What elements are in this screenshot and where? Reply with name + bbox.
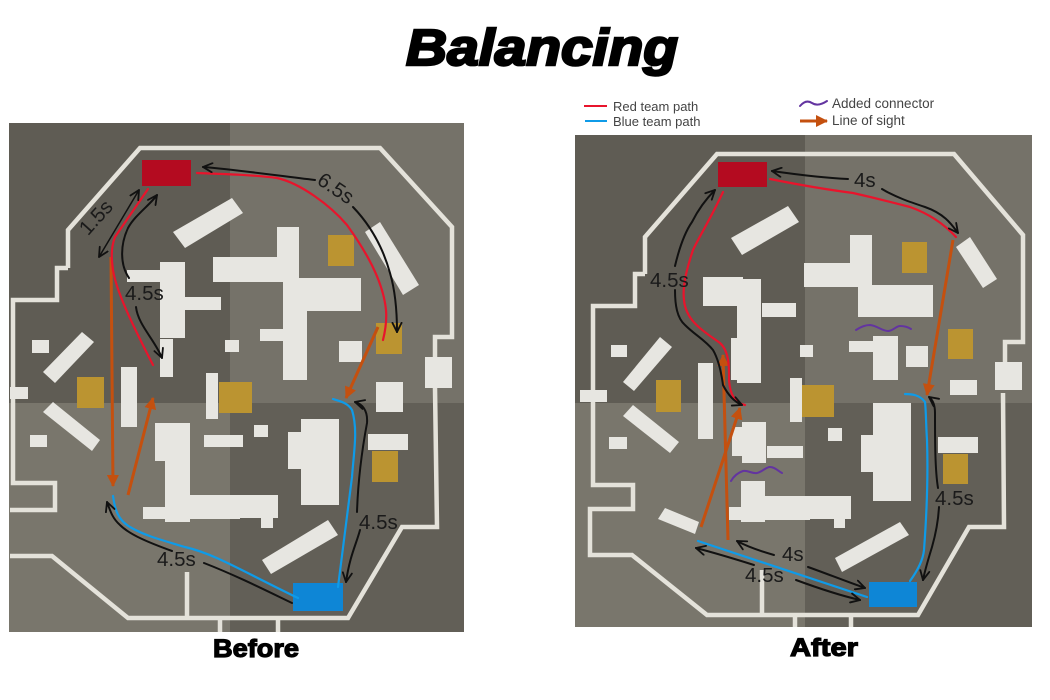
- objective zones: [77, 235, 402, 482]
- timing labels: 1.5s: [75, 196, 118, 240]
- added connectors: [731, 325, 911, 481]
- legend: line of sight: [800, 113, 905, 128]
- timing labels: 4.5s: [650, 269, 689, 292]
- blue team paths: [113, 399, 355, 598]
- map floor: [575, 135, 1032, 627]
- timing labels: [75, 168, 398, 571]
- red team paths: [112, 173, 386, 365]
- timing labels: 4.5s: [935, 487, 974, 510]
- blue spawn: [293, 583, 343, 611]
- blue spawn: [869, 582, 917, 607]
- timing arrows: [675, 171, 958, 600]
- title: Balancing: [406, 19, 678, 76]
- legend: [584, 96, 935, 129]
- panel: before map: [9, 123, 464, 632]
- timing labels: 4.5s: [157, 548, 196, 571]
- timing labels: 4.5s: [359, 511, 398, 534]
- buildings: [10, 198, 452, 574]
- blue team paths: [698, 394, 927, 597]
- timing labels: [650, 169, 974, 587]
- lines of sight: [111, 257, 378, 495]
- timing labels: 4.5s: [125, 282, 164, 305]
- legend: line of sight: Line of sight: [832, 113, 905, 128]
- map floor: [9, 123, 464, 632]
- outer walls: [590, 154, 1023, 627]
- buildings: [580, 206, 1022, 572]
- outer walls: [10, 148, 452, 632]
- timing labels: 6.5s: [313, 168, 358, 209]
- legend: added connector: Added connector: [832, 96, 935, 111]
- red spawn: [142, 160, 191, 186]
- timing labels: 4s: [782, 543, 804, 566]
- heading: before: Before: [213, 635, 299, 663]
- timing arrows: [99, 167, 397, 603]
- lines of sight: [701, 240, 953, 540]
- legend: blue team path: Blue team path: [613, 114, 700, 129]
- objective zones: [656, 242, 973, 484]
- panel: after map: [575, 135, 1032, 627]
- red team paths: [684, 179, 956, 405]
- timing labels: 4s: [854, 169, 876, 192]
- legend: red team path: Red team path: [613, 99, 698, 114]
- heading: after: After: [790, 634, 858, 662]
- timing labels: 4.5s: [745, 564, 784, 587]
- red spawn: [718, 162, 767, 187]
